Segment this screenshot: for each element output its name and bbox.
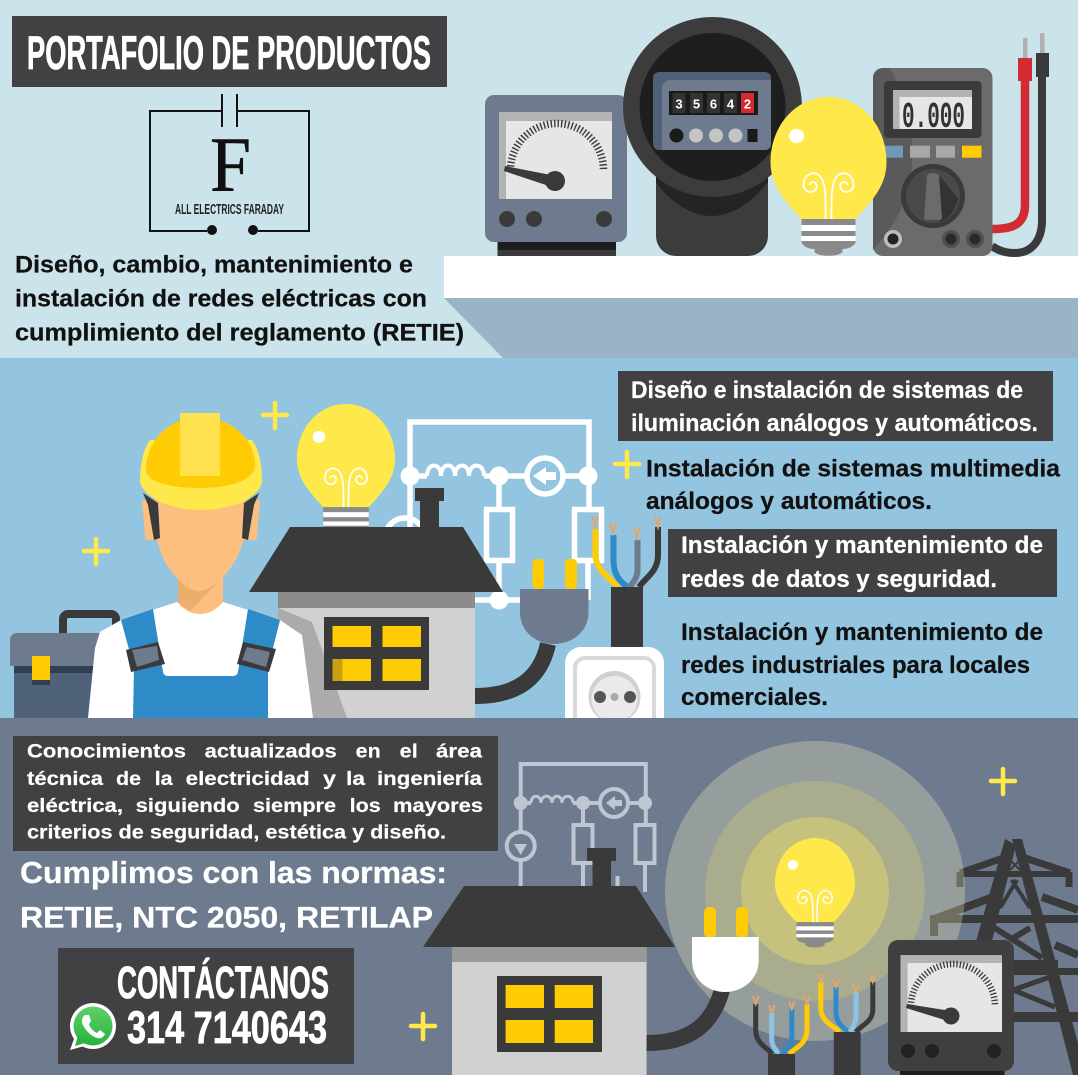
icon: electricity meter: 6	[710, 96, 717, 112]
icon: transmission tower	[930, 839, 1078, 1075]
shelf	[444, 256, 1078, 358]
text block: normas	[20, 855, 447, 934]
icon: sparkle plus	[411, 1014, 435, 1039]
icon: sparkle plus	[84, 539, 108, 564]
text block: redes industriales: redes industriales para locales	[681, 652, 1030, 679]
icon: sparkle plus	[263, 403, 287, 428]
text block: intro: cumplimiento del reglamento (RETIE)	[15, 320, 464, 346]
icon: sparkle plus	[615, 452, 639, 477]
panel: middle background	[0, 358, 1078, 718]
icon: electricity meter: 2	[744, 96, 751, 112]
callout: conocimientos: de	[116, 768, 141, 790]
contact box: CONTÁCTANOS	[117, 957, 329, 1008]
logo: All Electrics Faraday	[150, 94, 309, 235]
logo: All Electrics Faraday: F	[210, 121, 251, 208]
icon: multimeter: 0.000	[902, 97, 965, 138]
callout: conocimientos: actualizados	[205, 740, 337, 762]
icon: multimeter	[873, 33, 1049, 256]
callout: conocimientos: la	[346, 768, 365, 790]
icon: electricity meter: 5	[693, 96, 700, 112]
icon: electricity meter	[623, 17, 802, 256]
callout: conocimientos: en	[356, 740, 381, 762]
title: PORTAFOLIO DE PRODUCTOS	[27, 26, 431, 79]
icon: light bulb on shelf	[770, 97, 886, 256]
callout: iluminación: Diseño e instalación de sistemas de	[631, 377, 1023, 404]
callout: conocimientos: siempre	[253, 795, 336, 817]
panel: top background	[0, 0, 1078, 358]
text block: redes industriales	[681, 619, 1043, 711]
icon: sparkle plus	[991, 769, 1015, 794]
callout: redes de datos	[668, 529, 1057, 597]
text block: intro: Diseño, cambio, mantenimiento e	[15, 252, 413, 278]
callout: conocimientos: electricidad	[186, 768, 310, 790]
callout: redes de datos: redes de datos y seguridad.	[681, 566, 997, 593]
callout: conocimientos: los	[350, 795, 381, 817]
callout: conocimientos: y	[323, 768, 336, 790]
callout: conocimientos: siguiendo	[136, 795, 240, 817]
callout: conocimientos: criterios de seguridad, estética y diseño.	[27, 822, 446, 844]
text block: multimedia: Instalación de sistemas multimedia	[646, 456, 1061, 482]
circuit diagram: middle	[385, 422, 602, 610]
callout: conocimientos: ingeniería	[377, 768, 482, 790]
icon: electricity meter: 3	[675, 96, 683, 112]
icon: exposed cable left	[753, 996, 810, 1075]
icon: wall outlet	[565, 647, 664, 718]
icon: analog gauge	[485, 95, 627, 256]
callout: conocimientos	[13, 736, 498, 851]
callout: conocimientos: mayores	[393, 795, 483, 817]
callout: iluminación	[618, 371, 1053, 441]
contact box	[58, 948, 354, 1064]
callout: conocimientos: el	[400, 740, 418, 762]
icon: exposed cable right	[818, 974, 876, 1075]
worker illustration	[88, 413, 313, 718]
contact box: 314 7140643	[127, 1002, 327, 1053]
icon: light bulb over house	[297, 404, 395, 527]
text block: multimedia: análogos y automáticos.	[646, 488, 932, 515]
icon: white plug	[647, 907, 759, 1043]
icon: cable with exposed wires	[592, 516, 661, 647]
icon: house bottom	[423, 848, 675, 1075]
text block: normas: RETIE, NTC 2050, RETILAP	[20, 902, 433, 934]
icon: analog gauge bottom	[888, 940, 1014, 1075]
glow behind bottom bulb	[665, 741, 965, 1041]
icon: glowing light bulb	[775, 838, 855, 948]
callout: redes de datos: Instalación y mantenimiento de	[681, 532, 1043, 559]
callout: conocimientos: la	[155, 768, 173, 790]
panel: bottom background	[0, 718, 1078, 1075]
logo: All Electrics Faraday: ALL ELECTRICS FARADAY	[175, 202, 284, 218]
icon: electricity meter: 4	[727, 96, 735, 112]
icon: toolbox	[10, 614, 116, 718]
title	[12, 16, 447, 87]
text block: multimedia	[646, 456, 1061, 515]
circuit diagram: bottom	[507, 764, 654, 892]
text block: normas: Cumplimos con las normas:	[20, 855, 447, 890]
text block: intro: instalación de redes eléctricas con	[15, 286, 427, 312]
icon: house	[249, 488, 503, 718]
callout: iluminación: iluminación análogos y automáticos.	[631, 410, 1038, 437]
callout: conocimientos: Conocimientos	[27, 740, 186, 762]
text block: redes industriales: comerciales.	[681, 684, 828, 711]
icon: grey plug	[475, 559, 588, 696]
icon: WhatsApp	[70, 1003, 116, 1050]
callout: conocimientos: eléctrica,	[27, 795, 123, 817]
callout: conocimientos: técnica	[27, 768, 103, 790]
text block: redes industriales: Instalación y mantenimiento de	[681, 619, 1043, 646]
callout: conocimientos: área	[436, 740, 482, 762]
text block: intro	[15, 252, 464, 346]
